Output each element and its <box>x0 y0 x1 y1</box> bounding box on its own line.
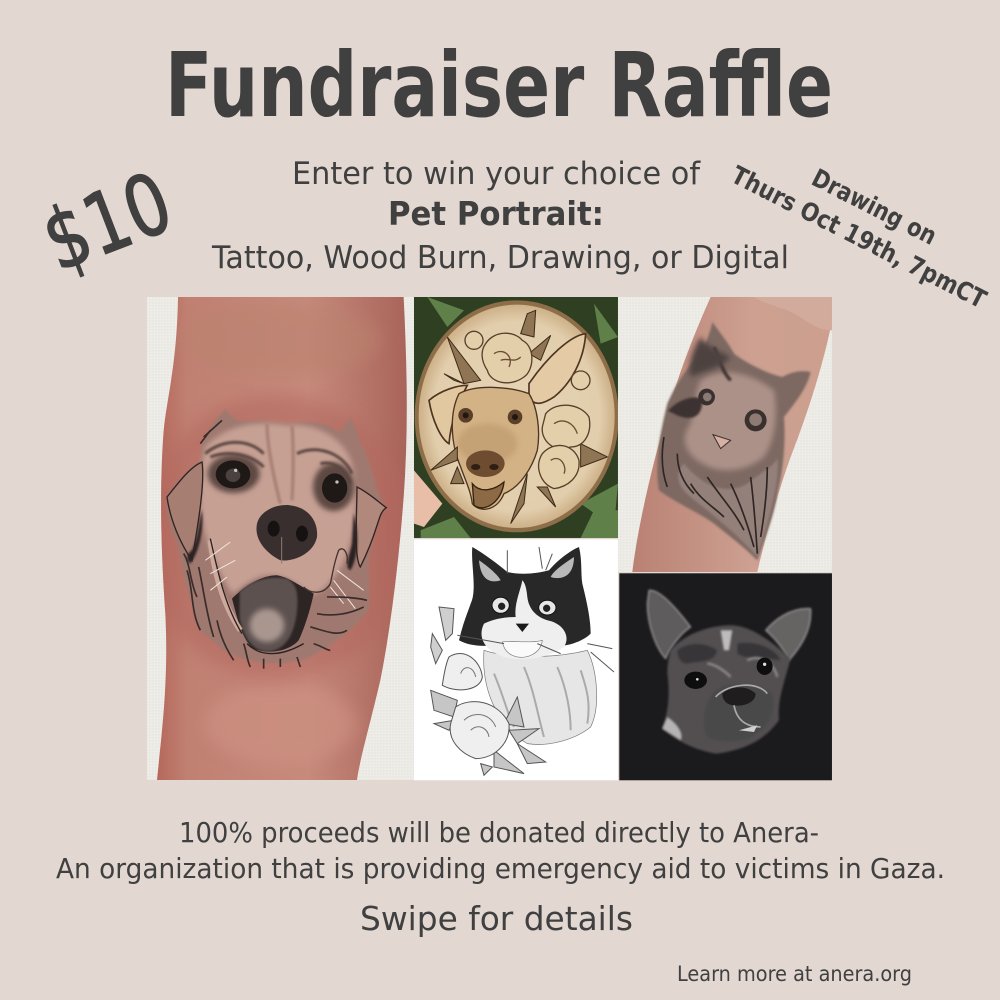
flowers on wood <box>465 331 590 489</box>
learn more: Learn more at anera.org <box>677 962 912 986</box>
photo: cat tattoo on arm <box>618 297 832 572</box>
proceeds text line 2: An organization that is providing emergency aid to victims in Gaza. <box>56 852 945 885</box>
drawing date callout: Drawing on <box>807 163 941 251</box>
price: $10 <box>30 153 185 291</box>
swipe for details: Swipe for details <box>360 899 633 938</box>
photo: dog tattoo on arm <box>144 297 414 780</box>
subtitle: enter to win: Enter to win your choice of <box>292 156 701 192</box>
proceeds text line 1: 100% proceeds will be donated directly to Anera- <box>179 816 819 849</box>
photo: dark dog portrait <box>619 573 832 780</box>
title: Fundraiser Raffle <box>165 33 833 137</box>
subtitle: portrait types: Tattoo, Wood Burn, Drawing, or Digital <box>211 240 789 276</box>
roses in drawing <box>431 607 546 775</box>
photo: cat drawing with flowers <box>414 539 618 780</box>
photo: wood burn dog <box>414 297 619 538</box>
subtitle: pet portrait: Pet Portrait: <box>388 194 604 233</box>
